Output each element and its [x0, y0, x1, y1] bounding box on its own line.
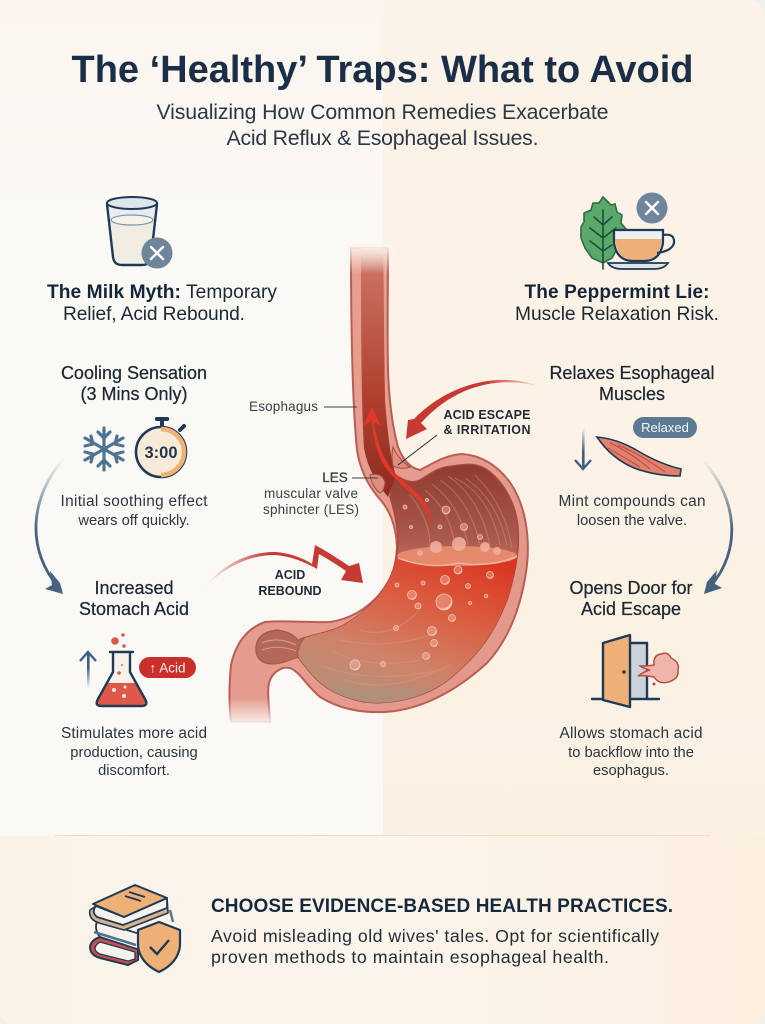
icon: flask — [97, 633, 146, 706]
subtitle: Visualizing How Common Remedies Exacerbate — [156, 100, 608, 124]
heading: opens door for acid escape: Acid Escape — [581, 599, 681, 619]
heading: increased stomach acid — [79, 578, 189, 619]
icon: muscle — [597, 437, 681, 476]
panel: relaxes esophageal muscles — [549, 363, 715, 529]
divider — [55, 834, 710, 836]
icon: stopwatch: 3:00 — [144, 444, 178, 462]
illustration: esophagus and stomach — [224, 244, 528, 726]
heading: the peppermint lie — [515, 282, 719, 325]
icon: milk glass with X badge — [107, 197, 172, 268]
pylorus chamber — [256, 630, 305, 664]
heading: increased stomach acid: Stomach Acid — [79, 599, 189, 619]
footer text — [211, 926, 659, 967]
icon: up arrow — [80, 652, 96, 688]
LES valve — [370, 447, 410, 493]
acid pool — [298, 537, 518, 703]
heading: the milk myth: The Milk Myth: Temporary — [47, 282, 277, 303]
icon: down arrow — [575, 428, 591, 469]
arrow: acid rebound — [205, 545, 363, 587]
description: to backflow into the — [568, 745, 694, 761]
panel: the milk myth — [47, 197, 277, 325]
description: discomfort. — [98, 763, 170, 779]
description: production, causing — [70, 745, 198, 761]
heading: the peppermint lie: Muscle Relaxation Risk. — [515, 304, 719, 325]
stomach cavity — [295, 464, 518, 703]
description — [560, 725, 702, 779]
label: acid escape and irritation: & IRRITATION — [444, 423, 530, 437]
description: Stimulates more acid — [61, 725, 207, 742]
icon: stopwatch — [136, 417, 186, 477]
label: acid rebound — [258, 568, 322, 598]
label: LES: muscular valve — [264, 486, 358, 501]
heading: opens door for acid escape: Opens Door for — [569, 578, 693, 598]
description: loosen the valve. — [577, 513, 687, 529]
footer text: Avoid misleading old wives' tales. Opt for scientifically — [211, 926, 659, 946]
duodenum bottom fade — [224, 698, 276, 726]
description — [558, 493, 706, 529]
badge: acid up: ↑ Acid — [149, 660, 186, 676]
description: esophagus. — [593, 763, 669, 779]
footer heading: CHOOSE EVIDENCE-BASED HEALTH PRACTICES. — [211, 896, 673, 917]
arrow: reflux — [363, 407, 431, 520]
heading: increased stomach acid: Increased — [94, 578, 174, 598]
stomach folds — [320, 475, 512, 685]
label: LES: LES — [322, 470, 348, 485]
description: Mint compounds can — [558, 493, 706, 510]
heading: cooling sensation: Cooling Sensation — [61, 363, 207, 383]
footer text: proven methods to maintain esophageal health. — [211, 947, 609, 967]
badge: relaxed — [633, 417, 697, 438]
label: esophagus — [249, 399, 357, 414]
arrow: relaxes to opens door — [703, 460, 732, 594]
label: acid escape and irritation: ACID ESCAPE — [444, 408, 530, 422]
stomach outer wall — [230, 248, 528, 722]
label: acid rebound: ACID — [275, 568, 305, 582]
panel: increased stomach acid — [61, 578, 207, 779]
heading: the peppermint lie: The Peppermint Lie: — [524, 282, 710, 303]
description: Allows stomach acid — [560, 725, 702, 742]
arrow: cooling to increased acid — [36, 458, 64, 594]
panel: the peppermint lie — [515, 192, 719, 325]
heading: cooling sensation — [61, 363, 207, 404]
title: The ‘Healthy’ Traps: What to Avoid — [72, 49, 694, 91]
subtitle — [156, 100, 608, 150]
heading: relaxes esophageal muscles: Muscles — [599, 384, 665, 404]
label: esophagus: Esophagus — [249, 399, 318, 414]
heading second line: Relief, Acid Rebound. — [63, 304, 245, 325]
icon: door with acid cloud — [592, 635, 678, 707]
label: LES — [263, 470, 378, 517]
esophagus top fade — [345, 244, 393, 274]
heading: cooling sensation: (3 Mins Only) — [80, 384, 188, 404]
panel: opens door — [560, 578, 702, 779]
panel: cooling sensation — [60, 363, 208, 529]
badge: acid up — [139, 657, 196, 678]
heading: opens door for acid escape — [569, 578, 693, 619]
description: Initial soothing effect — [60, 493, 208, 510]
icon: peppermint leaf and tea cup with X badge — [581, 192, 674, 269]
icon: snowflake — [85, 428, 123, 470]
subtitle: Acid Reflux & Esophageal Issues. — [226, 126, 538, 150]
heading: relaxes esophageal muscles: Relaxes Esophageal — [549, 363, 715, 383]
label: LES: sphincter (LES) — [263, 502, 359, 517]
description — [61, 725, 207, 779]
description — [60, 493, 208, 529]
heading: relaxes esophageal muscles — [549, 363, 715, 404]
bubbles — [350, 498, 494, 670]
badge: relaxed: Relaxed — [641, 420, 689, 435]
arrow: acid escape — [406, 380, 541, 439]
description: wears off quickly. — [77, 513, 190, 529]
esophagus lumen — [361, 248, 396, 497]
label: acid rebound: REBOUND — [258, 584, 322, 598]
label: acid escape and irritation — [398, 408, 530, 465]
panel: footer call to action — [90, 885, 673, 972]
icon: books with shield — [90, 885, 180, 972]
